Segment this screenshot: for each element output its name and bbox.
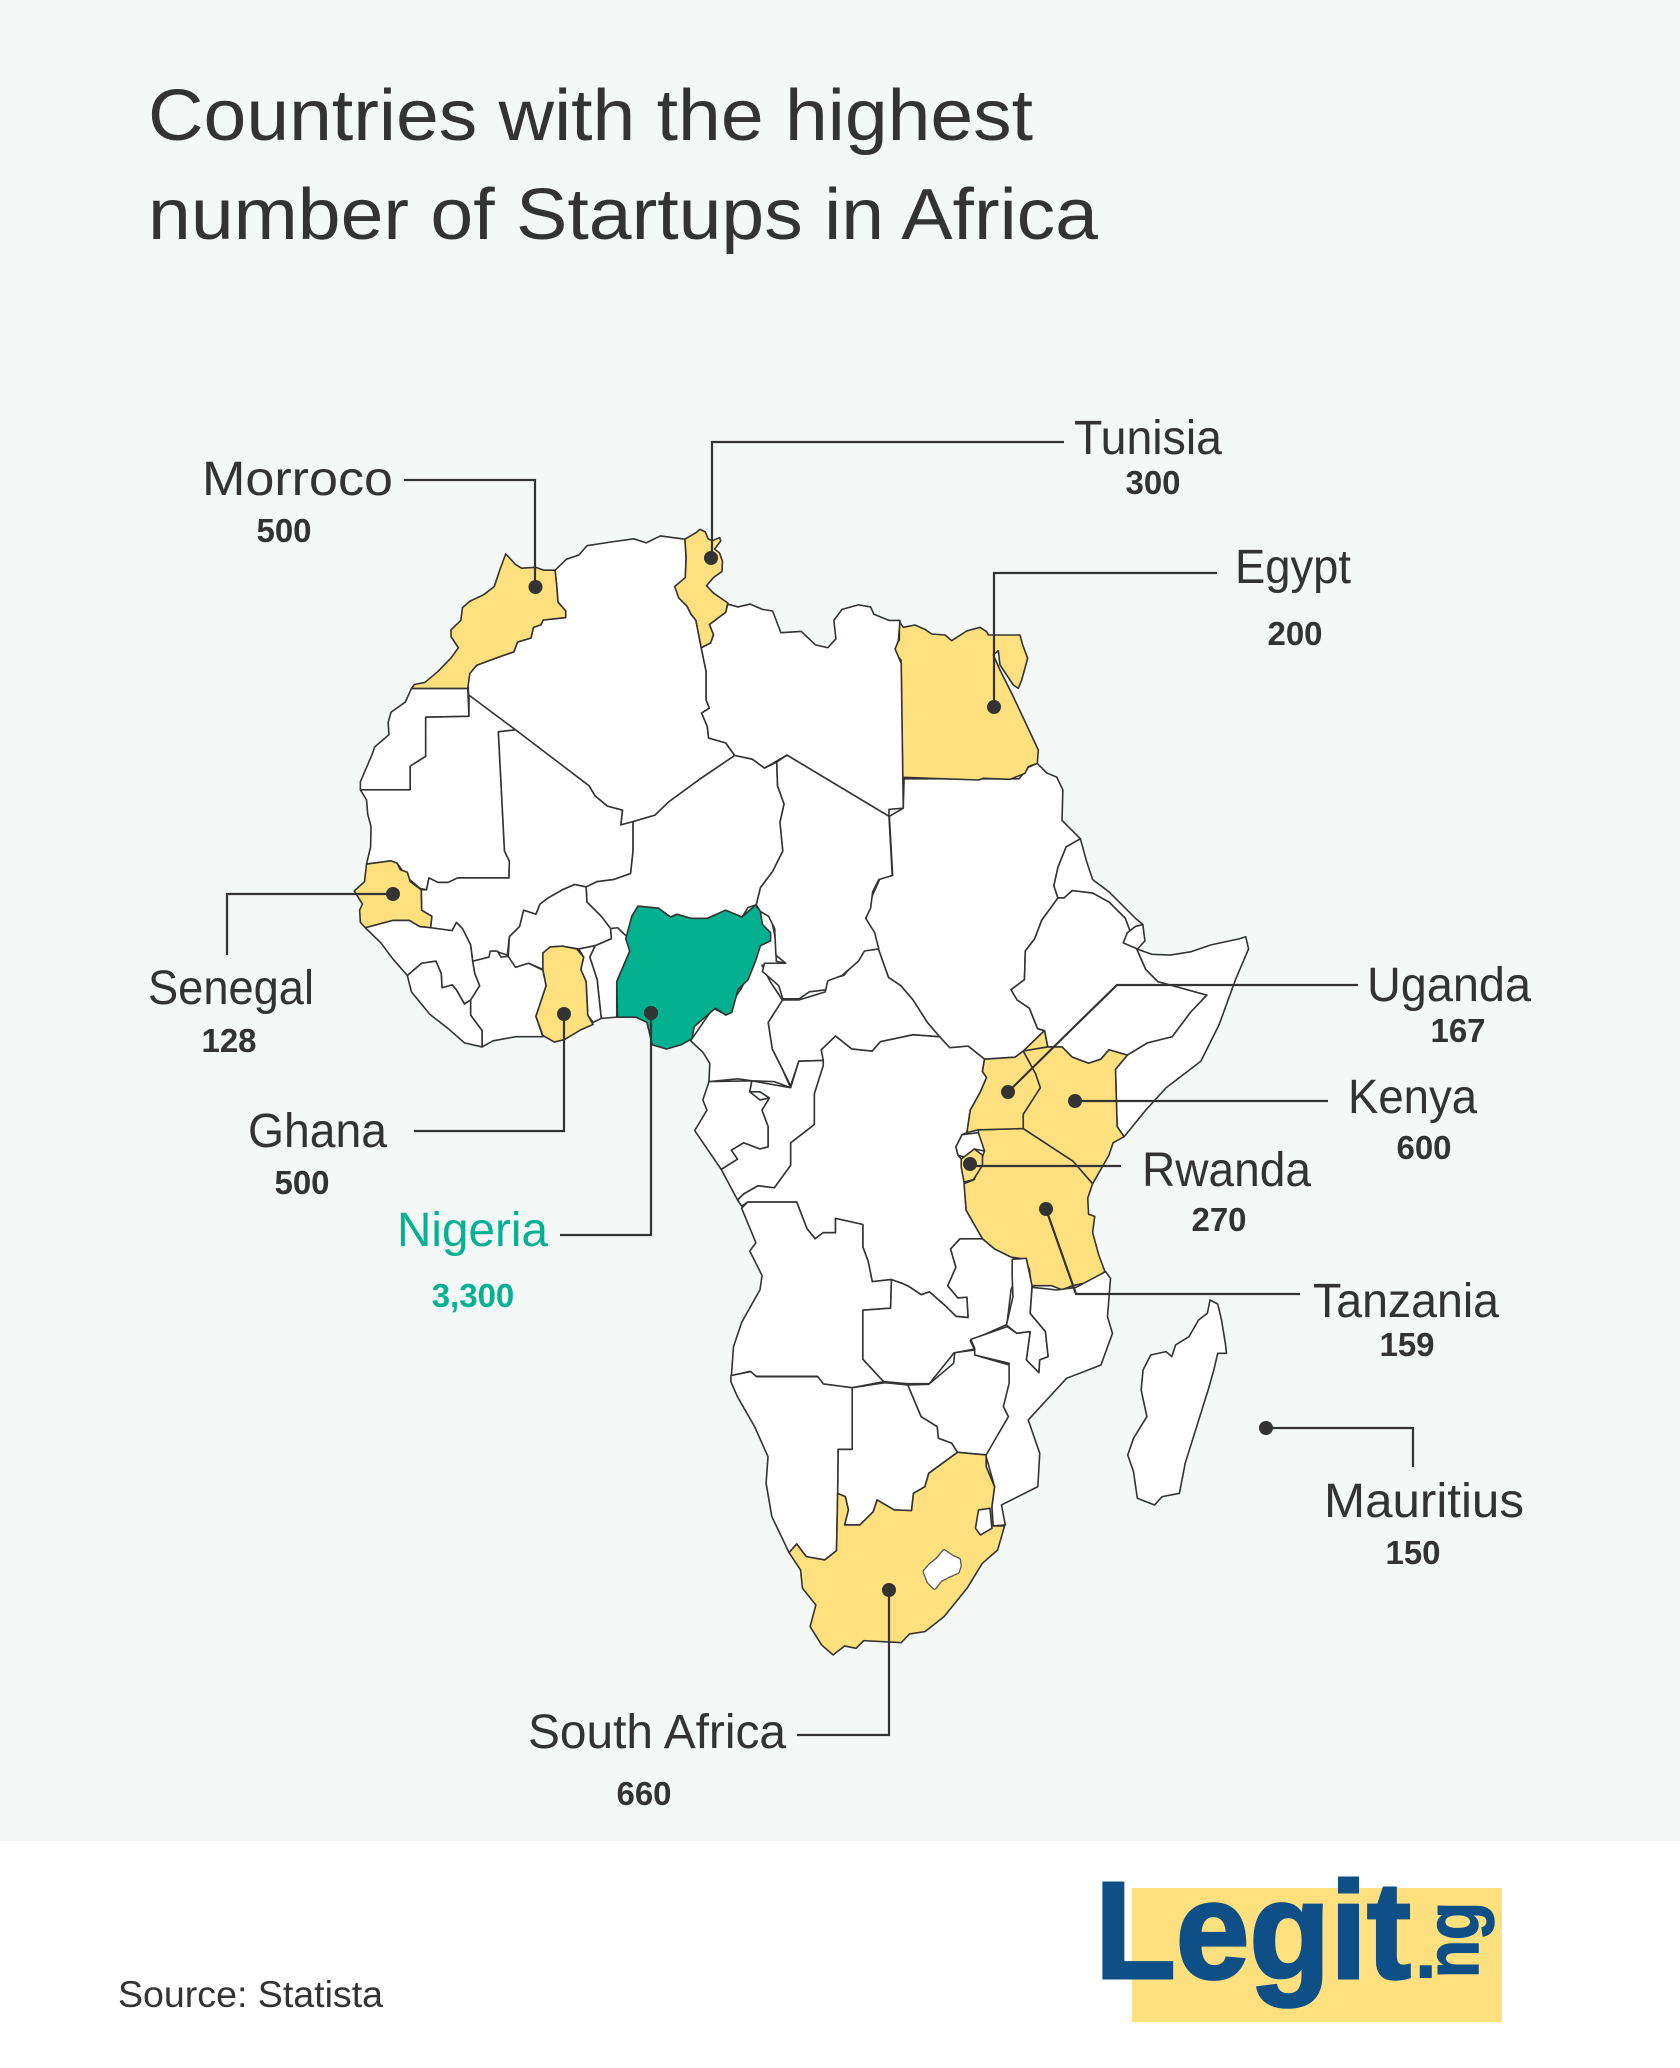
callout: Tunisia: Tunisia (1074, 412, 1222, 465)
country: Sudan (866, 763, 1080, 1059)
logo suffix: ng (1410, 1902, 1494, 1978)
callout: Tanzania (1039, 1202, 1499, 1363)
callout: Kenya (1068, 1071, 1477, 1166)
callout: Nigeria (397, 1006, 658, 1314)
southern countries (731, 1258, 1226, 1655)
country: Eswatini (975, 1508, 992, 1535)
callout: Morocco: 500 (256, 512, 312, 549)
country: Madagascar (1128, 1300, 1226, 1505)
callout: Rwanda: Rwanda (1142, 1144, 1311, 1197)
country: Gabon (695, 1081, 769, 1169)
callout: Egypt: 200 (1267, 615, 1323, 652)
country: Togo (579, 946, 601, 1022)
country: Cameroon (691, 905, 791, 1088)
country: Nigeria (617, 905, 771, 1049)
country: Djibouti (1123, 924, 1145, 949)
callout: Mauritius (1259, 1421, 1524, 1571)
callout: Egypt (987, 541, 1351, 714)
west and north countries (354, 529, 903, 1049)
callout: Nigeria: 3,300 (432, 1277, 514, 1314)
country: Libya (701, 604, 903, 816)
country: Niger (586, 756, 784, 937)
callout: Kenya: Kenya (1348, 1071, 1477, 1124)
callout: Mauritius: Mauritius (1324, 1475, 1524, 1528)
callout: South Africa: South Africa (528, 1706, 786, 1759)
country: Kenya (1023, 1047, 1127, 1184)
callout: Tanzania: 159 (1379, 1326, 1435, 1363)
country: Zimbabwe (908, 1350, 1009, 1455)
country: Congo (721, 1060, 823, 1200)
callout: Ghana: 500 (274, 1164, 330, 1201)
title: Countries with the highest (148, 76, 1033, 156)
callout: Uganda (1001, 959, 1531, 1099)
callout: Tunisia: 300 (1125, 464, 1181, 501)
map of Africa (354, 529, 1249, 1655)
country: Somalia (1116, 937, 1249, 1137)
north-east: Egypt (895, 622, 1038, 780)
country: Tanzania (964, 1129, 1105, 1290)
country: Burkina Faso (508, 884, 611, 969)
callout: Uganda: 167 (1430, 1012, 1486, 1049)
country: Tunisia (675, 529, 728, 648)
country: Western Sahara (360, 689, 469, 790)
callout: Ghana (248, 1007, 571, 1201)
country: DR Congo (738, 1035, 987, 1318)
country: Guinea (365, 920, 480, 1004)
callout: South Africa (528, 1583, 896, 1812)
source note: Source: Statista (118, 1974, 383, 2015)
country: Lesotho inner ring (925, 1552, 959, 1587)
callout: Rwanda: 270 (1191, 1201, 1247, 1238)
callout: Rwanda (963, 1144, 1311, 1238)
title (148, 76, 1099, 255)
logo: Legit.ng (1095, 1854, 1502, 2022)
callout: Kenya: 600 (1396, 1129, 1452, 1166)
country: Benin (590, 928, 630, 1018)
logo dot: . (1414, 1902, 1438, 1997)
country: Senegal (354, 861, 432, 928)
country: Eritrea (1054, 839, 1143, 949)
callout: Uganda: Uganda (1367, 959, 1531, 1012)
country: Central African Republic (768, 949, 940, 1086)
logo wordmark: Legit (1095, 1854, 1411, 2008)
country: Ivory Coast (471, 951, 546, 1047)
country: Ethiopia (1011, 891, 1207, 1063)
callout: Egypt: Egypt (1235, 541, 1351, 594)
country: Mali (421, 730, 633, 961)
country: Egypt (895, 622, 1038, 780)
country: Burundi (956, 1133, 984, 1157)
country: Botswana (838, 1383, 957, 1525)
callout: Senegal: Senegal (148, 962, 314, 1015)
country: Rwanda (961, 1149, 982, 1182)
logo background (1132, 1888, 1502, 2022)
country: Zambia (863, 1239, 1017, 1384)
callout: Mauritius: 150 (1385, 1534, 1441, 1571)
callout: South Africa: 660 (616, 1775, 672, 1812)
title: number of Startups in Africa (148, 175, 1099, 255)
country: Angola (731, 1202, 891, 1388)
callout: Senegal (148, 887, 400, 1059)
country: Namibia (731, 1372, 852, 1560)
callout: Tunisia (704, 412, 1222, 565)
callout: Morocco (202, 453, 542, 594)
country: Mauritania (360, 695, 516, 890)
callout: Ghana: Ghana (248, 1105, 387, 1158)
country: Morocco (411, 554, 566, 689)
callout: Tanzania: Tanzania (1313, 1275, 1499, 1328)
callout: Morocco: Morroco (202, 453, 393, 506)
country: South Africa (789, 1452, 1005, 1655)
country: Mozambique (971, 1272, 1112, 1526)
central and east countries (691, 763, 1249, 1388)
callout: Senegal: 128 (201, 1022, 257, 1059)
callout: Nigeria: Nigeria (397, 1204, 548, 1257)
country: Liberia and Sierra Leone (407, 961, 482, 1047)
country: Algeria (468, 536, 735, 825)
country: Uganda (967, 1031, 1048, 1133)
country: Lesotho (925, 1552, 959, 1587)
country: Ghana (536, 946, 593, 1042)
country: Chad (756, 755, 892, 999)
country: Malawi (1006, 1258, 1048, 1373)
